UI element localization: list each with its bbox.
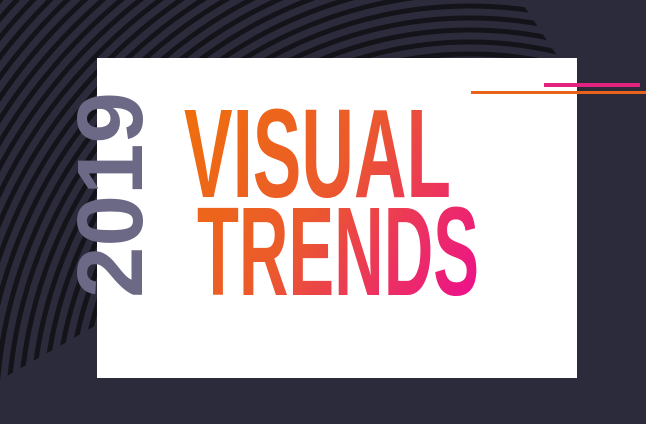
- background wavy lines: [0, 0, 556, 380]
- white panel: [97, 58, 577, 378]
- title: [184, 83, 479, 322]
- year 2019 vertical: 2019: [58, 92, 162, 298]
- title: VISUAL: [184, 83, 451, 224]
- accent line: pink: [544, 83, 640, 87]
- accent line: orange: [471, 91, 646, 94]
